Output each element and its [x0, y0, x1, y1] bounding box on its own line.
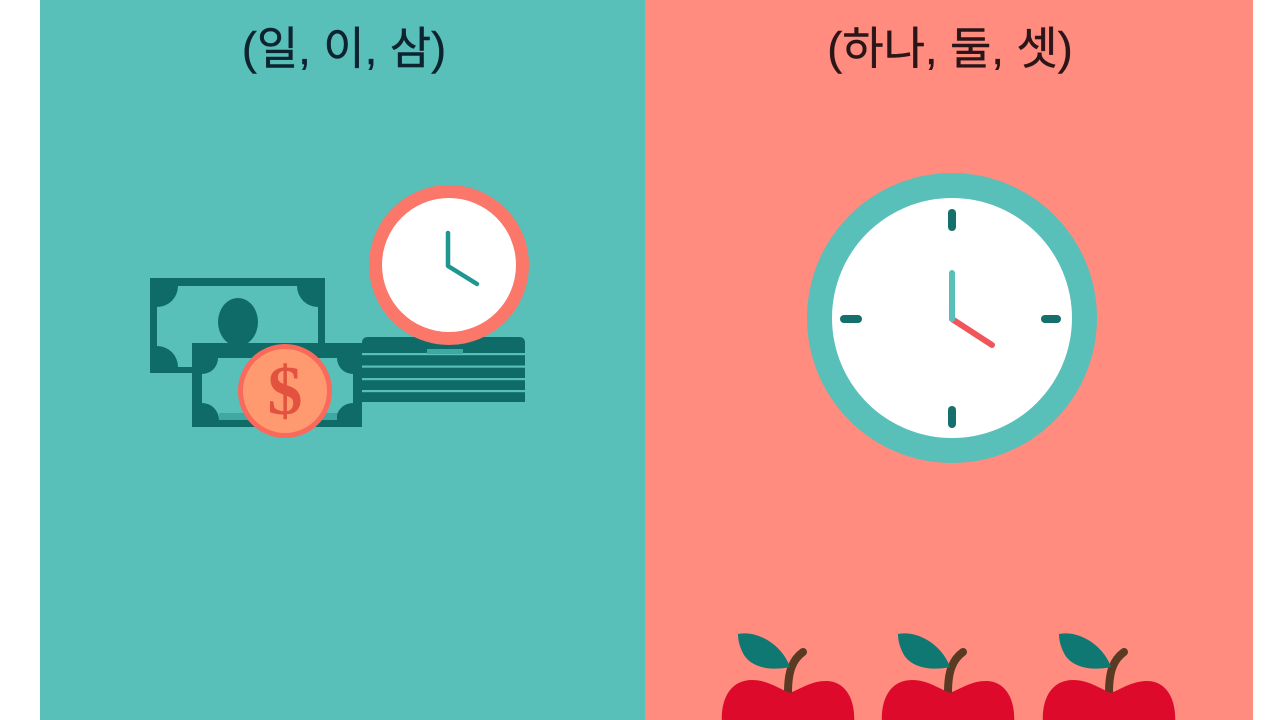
icon: large clock	[807, 173, 1097, 463]
icon: stack of banknotes	[362, 337, 525, 402]
icon: banknote back	[150, 278, 325, 373]
panel: salmon right	[645, 0, 1253, 720]
heading: native Korean numbers: (하나, 둘, 셋)	[827, 23, 1073, 74]
icon: apple 3	[1043, 633, 1175, 720]
icon: apple 1	[722, 633, 854, 720]
panel: teal left	[40, 0, 645, 720]
icon: small clock	[369, 185, 529, 345]
icon: dollar coin: $	[268, 353, 302, 430]
heading: sino-Korean numbers: (일, 이, 삼)	[242, 23, 446, 74]
icon: dollar coin	[238, 344, 332, 438]
icon: apple 2	[882, 633, 1014, 720]
icon: banknote front	[192, 343, 362, 427]
